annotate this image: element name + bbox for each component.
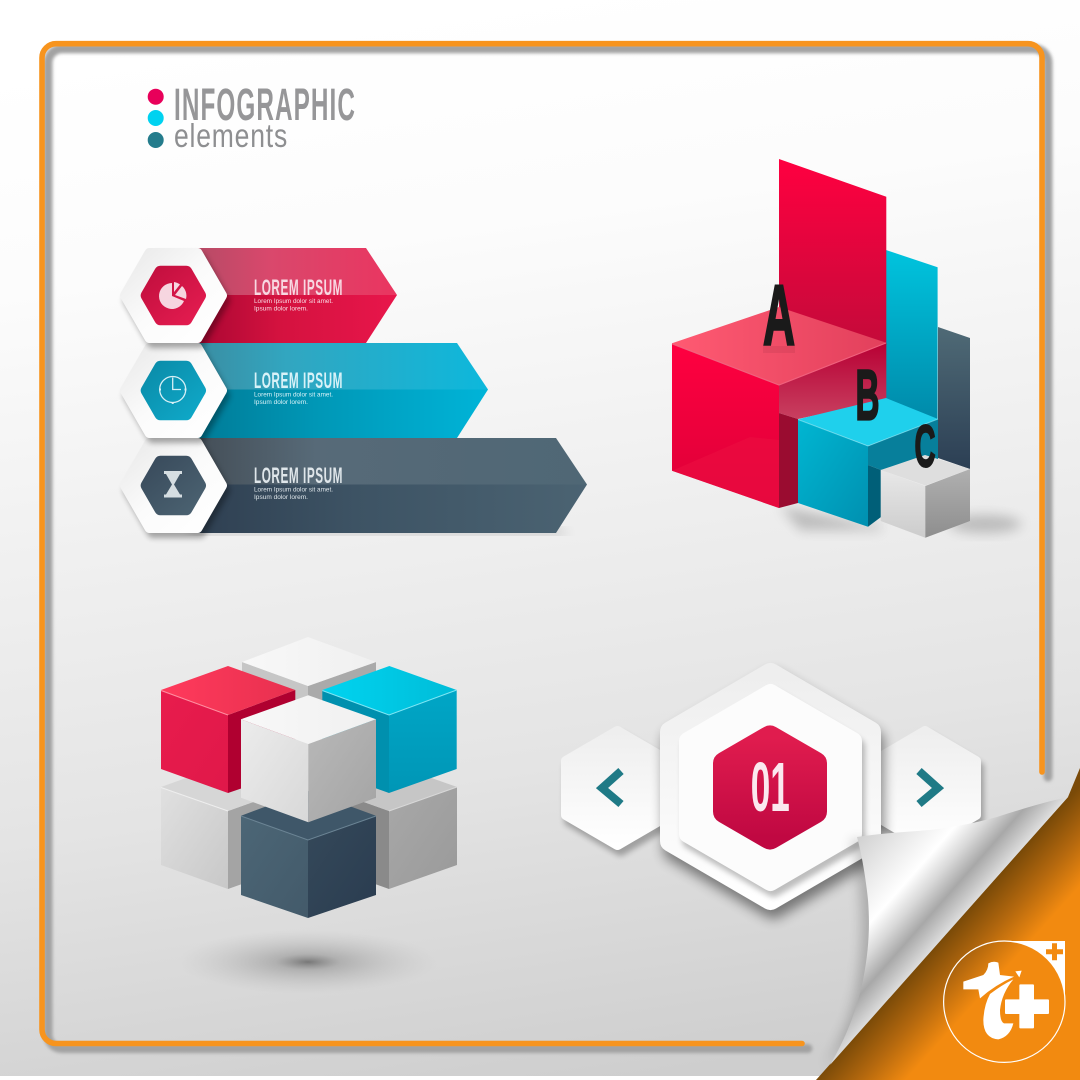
hexagon badge: blue clock <box>125 348 225 438</box>
cube: blue <box>322 666 457 793</box>
hex centre: inner plate <box>688 693 856 888</box>
logo small plus <box>1046 943 1063 960</box>
hexagon badge: red pie chart <box>125 253 225 343</box>
banner shadow <box>190 528 570 534</box>
block A: red cube <box>672 268 886 508</box>
cube: slate <box>241 791 376 918</box>
title text: elements <box>174 117 288 154</box>
icon: pie chart <box>159 282 186 309</box>
curl shadow <box>824 839 994 1067</box>
floor shadow <box>780 506 1021 533</box>
back panel: blue <box>886 250 938 425</box>
hexagon badge: slate hourglass <box>125 443 225 533</box>
back panel: slate <box>938 327 970 469</box>
banner: blue <box>190 343 488 438</box>
orange corner <box>816 768 1080 1080</box>
hex button: next <box>874 731 979 851</box>
banner text: blue: LOREM IPSUM <box>254 368 343 393</box>
cube: red <box>161 666 295 793</box>
banner text: blue: Lorem Ipsum dolor sit amet. <box>254 392 333 398</box>
banner text: blue: Ipsum dolor lorem. <box>254 399 308 406</box>
banner text: slate: Ipsum dolor lorem. <box>254 494 308 501</box>
page curl corner <box>816 768 1080 1080</box>
title text: INFOGRAPHIC <box>174 79 356 130</box>
floating shadow <box>178 930 438 994</box>
hex centre: red number badge <box>725 738 815 838</box>
panel: isometric cube stack <box>161 637 457 994</box>
banner text: blue <box>254 368 343 406</box>
hex button: previous <box>566 731 672 851</box>
back panel: red <box>779 159 886 345</box>
cube: lower right grey <box>322 763 457 889</box>
banner: slate <box>190 438 587 533</box>
number 01: 01 <box>751 748 790 826</box>
panel: 3D bar chart with A B C blocks <box>672 159 1021 538</box>
banner text: red <box>254 275 343 312</box>
banner text: slate <box>254 463 343 501</box>
banner text: red: Lorem Ipsum dolor sit amet. <box>254 298 333 305</box>
block B: blue cube <box>798 356 938 527</box>
block B: blue cube: B <box>856 356 880 436</box>
icon: right chevron <box>919 771 938 804</box>
banner text: slate: Lorem Ipsum dolor sit amet. <box>254 486 333 494</box>
banner text: slate: LOREM IPSUM <box>254 463 343 488</box>
icon: clock <box>159 376 186 404</box>
banner text: red: LOREM IPSUM <box>254 275 343 300</box>
letter A <box>763 268 795 364</box>
cube: front white <box>241 695 376 822</box>
curled page <box>830 797 1068 1065</box>
hex centre: outer plate <box>671 674 873 908</box>
letter A: A <box>763 268 795 364</box>
logo mark t plus <box>963 962 1048 1039</box>
icon: hourglass <box>164 471 182 498</box>
panel: arrow banners <box>125 248 587 534</box>
banner text: red: Ipsum dolor lorem. <box>254 306 308 312</box>
logo ring <box>944 941 1065 1062</box>
title block <box>148 79 356 154</box>
logo white corner <box>1004 941 1065 1002</box>
icon: left chevron <box>602 771 621 804</box>
cube: lower left grey <box>161 763 295 889</box>
panel: hexagon pager <box>566 674 979 908</box>
cube: top back white <box>242 637 376 725</box>
block C: white cube: C <box>914 414 936 480</box>
block C: white cube <box>881 414 970 538</box>
title dots <box>148 89 164 148</box>
banner: red <box>190 248 397 343</box>
title text <box>174 79 356 154</box>
logo <box>944 941 1065 1062</box>
